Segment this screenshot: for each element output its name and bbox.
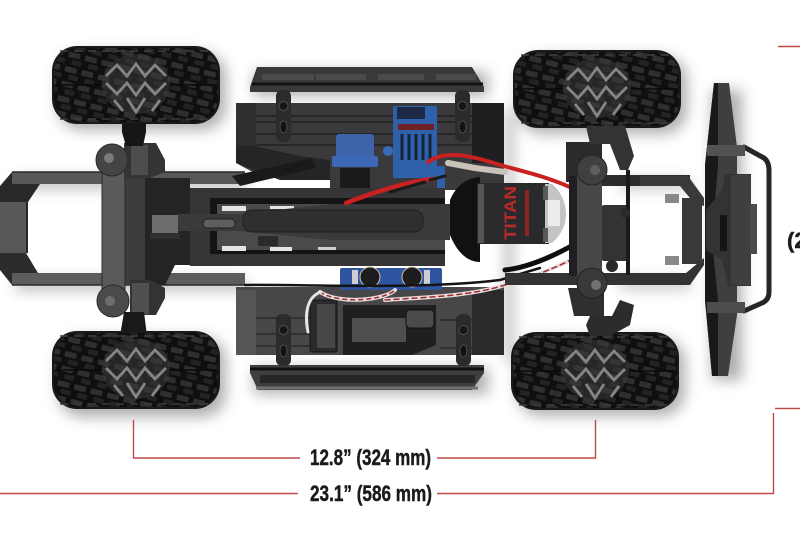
speed control <box>383 106 445 188</box>
front assembly <box>505 83 769 376</box>
tire: front bottom <box>511 332 679 410</box>
tire: front top <box>513 50 681 128</box>
steering servo <box>332 134 378 188</box>
top running board <box>250 67 484 92</box>
dimension line: overall length <box>0 408 800 494</box>
receiver box and plate <box>310 300 436 355</box>
dimension line: width at tires <box>134 420 596 458</box>
winch <box>706 174 757 286</box>
bumper mount brackets <box>276 90 471 366</box>
tire: rear bottom <box>52 331 220 409</box>
upper floor panel <box>232 103 504 190</box>
dimension line: top right tick <box>778 46 800 48</box>
transmission brace <box>150 204 450 240</box>
rear frame rails <box>0 172 245 285</box>
red power wires <box>346 155 572 203</box>
rear axle beam <box>96 120 190 336</box>
front frame rails <box>505 175 704 285</box>
servo wires <box>245 244 575 332</box>
lower servos <box>340 267 442 290</box>
central frame <box>190 188 445 266</box>
front bumper <box>705 83 745 376</box>
bumper hoop <box>744 147 769 311</box>
motor label: TITAN <box>501 186 520 240</box>
label: 12.8 inch dimension: 12.8” (324 mm) <box>310 445 431 470</box>
motor <box>450 177 566 262</box>
center chassis <box>150 67 575 390</box>
label: 23.1 inch dimension: 23.1” (586 mm) <box>310 481 432 506</box>
front axle <box>566 126 634 336</box>
tire: rear top <box>52 46 220 124</box>
rear assembly <box>0 120 245 336</box>
drop shadows <box>16 52 742 417</box>
lower floor panel <box>236 287 504 355</box>
bottom running board <box>250 365 484 390</box>
